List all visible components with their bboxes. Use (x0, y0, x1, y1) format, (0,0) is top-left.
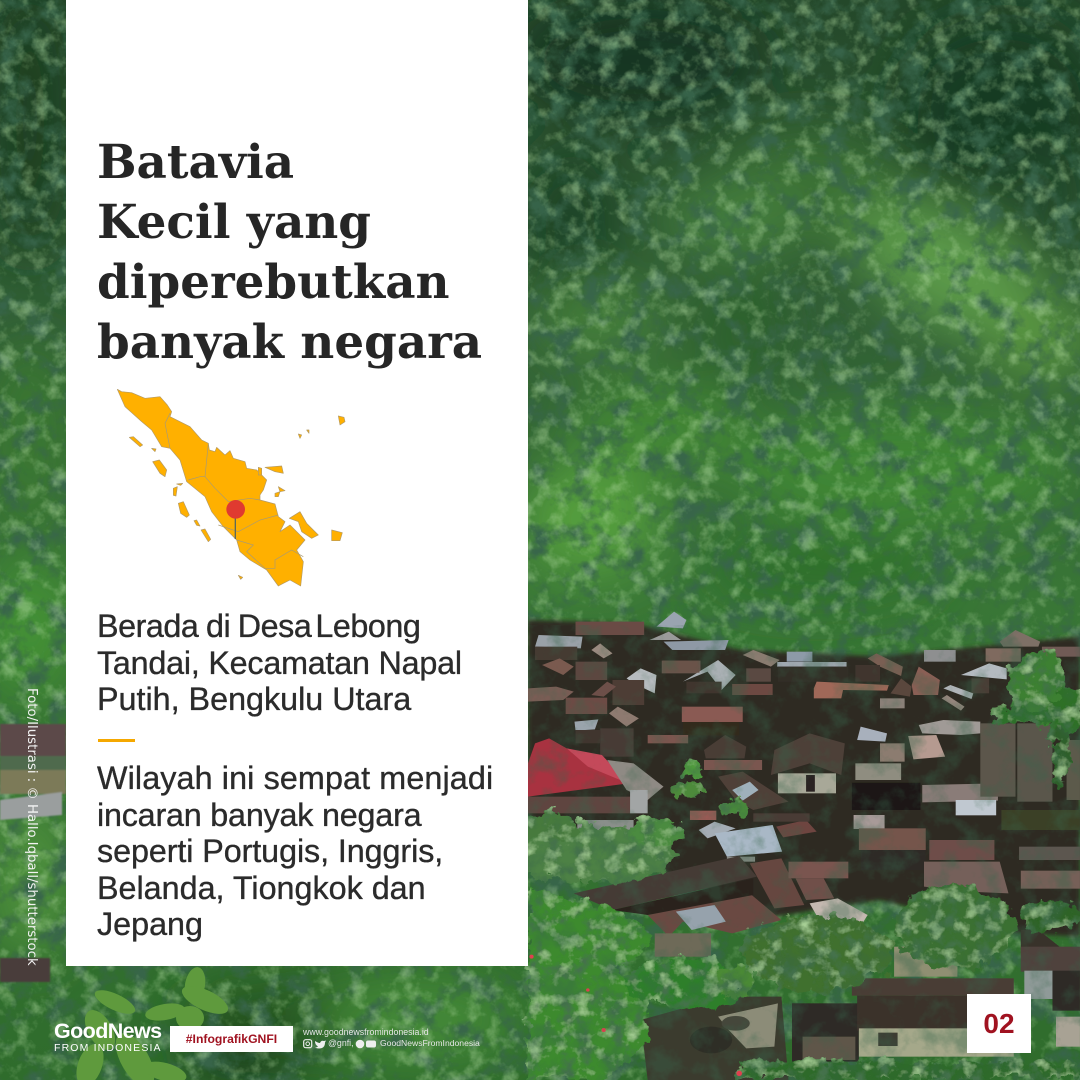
title: Batavia (97, 135, 294, 190)
location text: Putih, Bengkulu Utara (97, 681, 411, 717)
location text (97, 608, 462, 717)
photo credit: Foto/Ilustrasi : © Hallo.Iqball/shutterstock (24, 688, 39, 966)
left strip buildings (0, 724, 66, 982)
title: Kecil yang (97, 195, 371, 250)
title: diperebutkan (97, 255, 450, 310)
location text: Berada di Desa Lebong (97, 608, 420, 644)
description text (97, 760, 493, 942)
map of Sumatra with pin (117, 389, 346, 586)
logo GoodNews (54, 1019, 162, 1054)
foreground leaves (71, 966, 232, 1080)
trees in front of village (507, 650, 1080, 1080)
description text: Jepang (97, 906, 203, 942)
divider (98, 739, 135, 742)
village (507, 612, 1080, 1080)
description text: incaran banyak negara (97, 796, 421, 832)
description text: Belanda, Tiongkok dan (97, 870, 426, 906)
hashtag badge: #InfografikGNFI (186, 1032, 277, 1046)
social links: GoodNewsFromIndonesia (380, 1038, 480, 1048)
title: banyak negara (97, 315, 482, 370)
page number: 02 (983, 1008, 1015, 1039)
social links: www.goodnewsfromindonesia.id (303, 1027, 429, 1037)
social links (303, 1027, 480, 1048)
white content panel (66, 0, 528, 966)
social links: @gnfi, (328, 1038, 354, 1048)
logo GoodNews: FROM INDONESIA (54, 1042, 162, 1054)
title (97, 135, 482, 370)
description text: Wilayah ini sempat menjadi (97, 760, 493, 796)
river, rocks and bottom buildings (641, 930, 1080, 1080)
location text: Tandai, Kecamatan Napal (97, 644, 462, 680)
logo GoodNews: GoodNews (54, 1019, 162, 1043)
description text: seperti Portugis, Inggris, (97, 833, 443, 869)
hashtag badge (170, 1026, 293, 1052)
page number (967, 994, 1031, 1053)
